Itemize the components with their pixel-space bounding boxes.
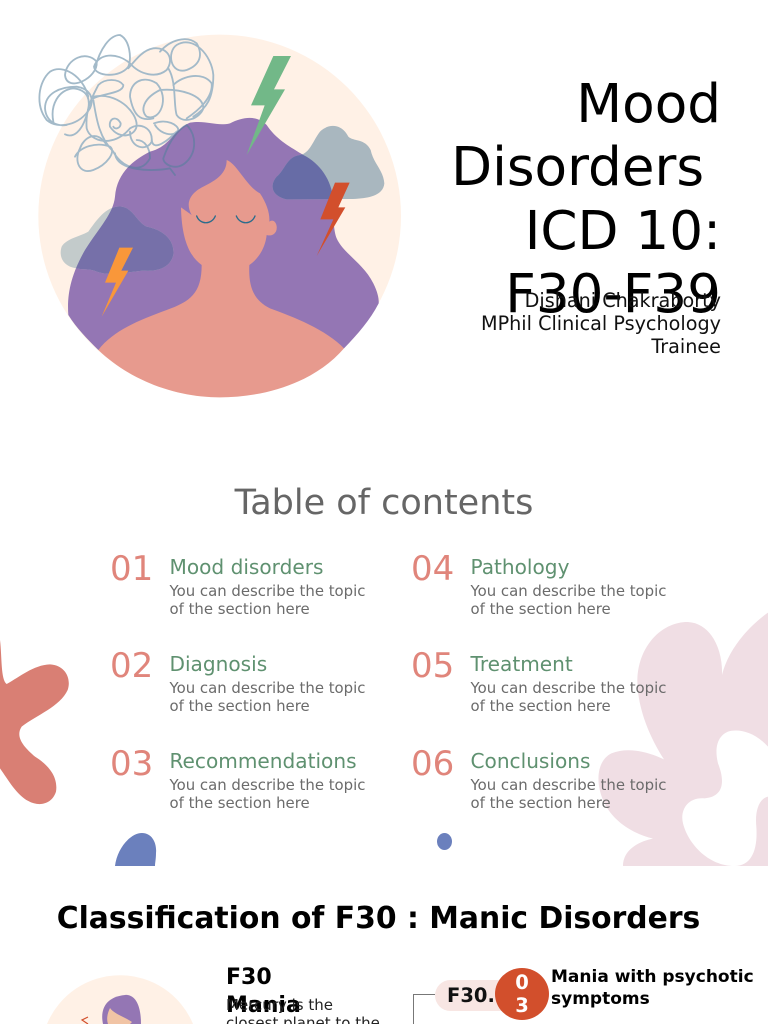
connector	[413, 994, 435, 1024]
illustration: woman with storm clouds	[38, 34, 401, 398]
item 01: 01	[110, 549, 153, 589]
hair	[102, 995, 141, 1024]
item 02: of the section here	[170, 697, 310, 715]
pill: F30.x	[435, 980, 515, 1011]
title: Mood Disorders ICD 10: F30-F39	[451, 73, 721, 325]
item 01: of the section here	[170, 600, 310, 618]
scribble over hair	[128, 124, 195, 176]
body and face	[98, 160, 344, 397]
label: F30.: F30.	[447, 984, 495, 1007]
label: F30 Mania: Mania	[226, 993, 301, 1018]
text: mania with psychotic symptoms: symptoms	[551, 989, 650, 1009]
item 04: of the section here	[470, 600, 611, 618]
small illustration	[47, 975, 193, 1024]
scribble	[39, 35, 213, 175]
item 01: Mood disorders	[170, 555, 323, 579]
badge: 03	[495, 968, 549, 1020]
item 03: You can describe the topic	[170, 776, 365, 794]
circle	[47, 975, 193, 1024]
item 06: Conclusions	[470, 749, 590, 773]
cloud: left	[61, 207, 173, 274]
lightning: green	[247, 56, 291, 155]
item 01	[110, 549, 365, 618]
blob: blue drop	[115, 833, 156, 866]
author: Dishani Chakraborty MPhil Clinical Psychology Trainee	[481, 289, 721, 358]
background circle	[38, 35, 401, 397]
text: description: Mercury is the	[226, 996, 333, 1014]
blob: pink	[598, 612, 768, 866]
item 03	[110, 744, 365, 812]
item 05: Treatment	[470, 652, 573, 676]
badge: 03: 3	[515, 994, 529, 1017]
item 02: You can describe the topic	[170, 679, 365, 697]
item 01: You can describe the topic	[170, 582, 365, 600]
item 05: of the section here	[470, 697, 611, 715]
heading: table of contents: Table of contents	[235, 483, 533, 523]
item 03: 03	[110, 744, 153, 784]
item 05	[411, 646, 666, 715]
text: mania with psychotic symptoms	[551, 967, 754, 1009]
section: table of contents	[0, 483, 768, 866]
eyes	[197, 216, 255, 223]
item 02: Diagnosis	[170, 652, 267, 676]
item 04: 04	[411, 549, 454, 589]
label: F30 Mania	[226, 965, 301, 1018]
lightning mark	[82, 1017, 88, 1024]
text: description	[226, 996, 380, 1024]
heading: classification: Classification of F30 : Manic Disorders	[57, 901, 700, 936]
face	[107, 1008, 132, 1024]
text: mania with psychotic symptoms: Mania with psychotic	[551, 967, 754, 987]
item 06	[411, 744, 666, 812]
item 03: of the section here	[170, 794, 310, 812]
label: F30 Mania: F30	[226, 965, 272, 990]
badge: 03: 0	[515, 971, 529, 994]
item 02	[110, 646, 365, 715]
item 04: Pathology	[470, 555, 569, 579]
item 06: You can describe the topic	[470, 776, 666, 794]
lightning: red	[317, 183, 350, 256]
cloud: right	[273, 126, 384, 199]
item 04: You can describe the topic	[470, 582, 666, 600]
blob: coral	[0, 640, 69, 804]
item 02: 02	[110, 646, 153, 686]
item 06: 06	[411, 744, 454, 784]
item 05: You can describe the topic	[470, 679, 666, 697]
lightning: orange	[102, 248, 133, 317]
item 03: Recommendations	[170, 749, 357, 773]
item 05: 05	[411, 646, 454, 686]
dot: blue	[437, 833, 452, 850]
item 04	[411, 549, 666, 618]
hair	[68, 118, 379, 350]
item 06: of the section here	[470, 794, 611, 812]
